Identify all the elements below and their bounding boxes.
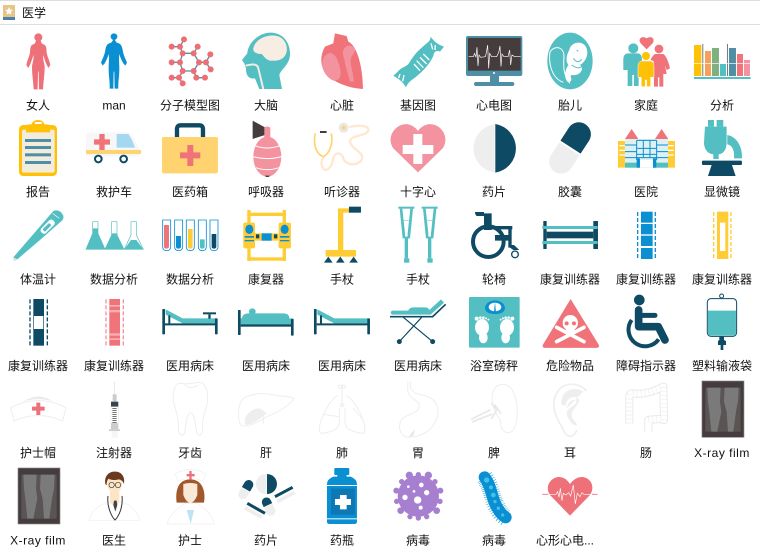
label: 医用病床 <box>166 358 214 373</box>
cell: 女人 <box>26 33 50 112</box>
cell: 医用病床 4 <box>390 299 446 373</box>
cell: 牙齿 <box>173 382 208 460</box>
label: 轮椅 <box>482 272 506 286</box>
icon: molecule <box>169 36 214 86</box>
cell: 数据分析 <box>86 222 143 286</box>
icon: clipboard <box>19 120 57 176</box>
icon: header star <box>3 5 15 20</box>
label: 肠 <box>640 446 652 460</box>
icon: bacterium <box>484 477 506 517</box>
icon: rehab device <box>243 210 291 261</box>
cell: 心形心电图 <box>536 477 598 548</box>
cell: 医用病床 3 <box>314 309 370 373</box>
label: 女人 <box>26 98 50 112</box>
label: X-ray film <box>10 534 66 548</box>
icon: heart with cross <box>391 124 445 172</box>
label: 康复器 <box>248 272 284 286</box>
cell: 胎儿 <box>547 33 593 112</box>
cell: 家庭 <box>623 37 670 112</box>
cell: 数据分析 2 <box>163 220 218 286</box>
cell: 脾 <box>472 384 517 460</box>
label: 病毒 <box>406 532 430 548</box>
cell: 报告 <box>19 120 57 199</box>
icon: yellow rehab strip <box>714 212 731 259</box>
icon: x-ray film <box>18 468 60 524</box>
label: 呼吸器 <box>248 185 284 199</box>
cell: 病毒 1 <box>393 472 443 548</box>
label: 注射器 <box>96 445 132 460</box>
icon: medicine case <box>162 125 218 173</box>
icon: blue rehab strip <box>638 212 655 259</box>
cell: 肝 <box>238 394 294 460</box>
icon: purple virus <box>393 472 443 521</box>
label: 听诊器 <box>324 185 360 199</box>
label: 康复训练器 <box>540 272 600 286</box>
icon: test tubes <box>163 220 218 251</box>
label: 障碍指示器 <box>616 358 676 373</box>
cell: 听诊器 <box>315 123 368 199</box>
icon: hospital bed <box>314 309 370 334</box>
label: 危险物品 <box>546 358 594 373</box>
cell: 医用病床 1 <box>162 309 218 373</box>
label: 康复训练器 <box>8 358 68 373</box>
cell: 医药箱 <box>162 125 218 199</box>
label: 医用病床 <box>318 358 366 373</box>
icon: heart organ <box>321 33 363 89</box>
icon: ECG monitor <box>466 36 522 86</box>
label: 数据分析 <box>90 272 138 286</box>
cell: 轮椅 <box>473 212 519 286</box>
label: 肝 <box>260 446 272 460</box>
icon: spleen <box>472 384 517 433</box>
cell: 护士帽 <box>11 397 66 460</box>
label: 报告 <box>26 184 50 199</box>
cell: 康复训练器 2 <box>616 212 676 286</box>
icon: intestine <box>629 387 664 432</box>
label: 手杖 <box>330 272 354 286</box>
cell: 护士 <box>167 469 214 548</box>
icon: stethoscope <box>315 123 368 170</box>
cell: 肠 <box>629 387 664 460</box>
cell: 呼吸器 <box>248 121 284 199</box>
cell: 分子模型图 <box>160 36 220 113</box>
label: 心脏 <box>330 98 354 112</box>
icon: stomach <box>400 382 438 437</box>
label: man <box>102 98 126 112</box>
label: 护士 <box>178 534 202 548</box>
label: 家庭 <box>634 98 658 112</box>
label: 医院 <box>634 185 658 199</box>
icon: bar chart <box>694 44 751 79</box>
icon: family <box>623 37 670 87</box>
label: 心电图 <box>476 98 512 112</box>
label: 医药箱 <box>172 184 208 199</box>
icon: doctor <box>89 472 139 521</box>
header bar <box>0 0 760 25</box>
icon: nurse cap <box>11 397 66 421</box>
cell: 康复训练器 1 <box>540 221 600 286</box>
cell: 医生 <box>89 472 139 548</box>
label: 大脑 <box>254 98 278 112</box>
icon: bathroom scale <box>469 297 520 348</box>
cell: X-ray film 1 <box>694 381 750 460</box>
icon: capsule <box>544 118 595 178</box>
icon: microscope <box>702 120 742 176</box>
icon: woman <box>26 33 50 89</box>
icon: hospital bed with patient <box>238 308 294 336</box>
label: 牙齿 <box>178 446 202 460</box>
label: 塑料输液袋 <box>692 358 752 373</box>
cell: 药片 2 <box>237 474 295 548</box>
label: 基因图 <box>400 98 436 112</box>
cell: 十字心 <box>391 124 445 199</box>
icon: syringe <box>109 382 120 438</box>
cell: 危险物品 <box>543 300 599 373</box>
label: 护士帽 <box>20 445 56 460</box>
icon: crutches <box>398 207 438 263</box>
cell: 心电图 <box>466 36 522 112</box>
label: 康复训练器 <box>692 272 752 286</box>
icon: dark rehab strip <box>30 299 47 346</box>
label: 病毒 <box>482 532 506 548</box>
cell: 心脏 <box>321 33 363 112</box>
label: 显微镜 <box>704 184 740 199</box>
icon: half tablet <box>473 124 516 173</box>
cell: X-ray film 2 <box>10 468 66 548</box>
icon: assorted pills <box>237 474 295 517</box>
label: 康复训练器 <box>84 358 144 373</box>
cell: 胃 <box>400 382 438 460</box>
label: 医用病床 <box>242 358 290 373</box>
icon: hospital <box>618 129 675 168</box>
label: 十字心 <box>400 184 436 199</box>
icon: man <box>101 33 127 89</box>
icon: hazard triangle <box>543 300 599 347</box>
label: 医生 <box>102 534 126 548</box>
label: 浴室磅秤 <box>470 358 518 373</box>
cell: 分析 <box>694 44 751 112</box>
icon: wheelchair <box>473 212 519 258</box>
label: X-ray film <box>694 446 750 460</box>
label: 耳 <box>564 446 576 460</box>
icon: heart with ECG <box>542 477 598 516</box>
label: 医用病床 <box>394 358 442 373</box>
icon: x-ray film <box>702 381 744 437</box>
label: 康复训练器 <box>616 272 676 286</box>
cell: 药片 <box>473 124 516 199</box>
icon: ambulance <box>86 132 141 162</box>
cell: 手杖 <box>324 207 361 286</box>
icon: ear <box>554 384 587 436</box>
icon: lungs <box>319 385 365 433</box>
icon: brain head <box>242 33 290 89</box>
cell: 胶囊 <box>544 118 595 199</box>
cell: 救护车 <box>86 132 141 199</box>
icon: red rehab strip <box>106 299 123 346</box>
cell: 医用病床 2 <box>238 308 294 373</box>
icon: nurse <box>167 469 214 524</box>
icon: hospital bed with table <box>162 309 218 334</box>
icon: liver <box>238 394 294 426</box>
cell: 康复训练器 3 <box>692 212 752 286</box>
label: 体温计 <box>20 272 56 286</box>
cell: 医院 <box>618 129 675 199</box>
cell: 大脑 <box>242 33 290 112</box>
cell: 注射器 <box>96 382 132 460</box>
label: 手杖 <box>406 272 430 286</box>
label: 药瓶 <box>330 534 354 548</box>
icon: flasks <box>86 222 143 249</box>
cell: 体温计 <box>13 210 63 286</box>
heading: 医学 <box>22 5 46 20</box>
icon: IV bag <box>707 294 737 350</box>
cell: 显微镜 <box>702 120 742 199</box>
cell: 康复训练器 5 <box>84 299 144 373</box>
label: 胎儿 <box>558 98 582 112</box>
label: 肺 <box>336 446 348 460</box>
icon: tooth <box>173 382 208 435</box>
cell: 康复训练器 4 <box>8 299 68 373</box>
cell: 浴室磅秤 <box>469 297 520 373</box>
label: 数据分析 <box>166 272 214 286</box>
label: 救护车 <box>96 184 132 199</box>
cell: 康复器 <box>243 210 291 286</box>
cell: 障碍指示器 <box>616 295 676 373</box>
label: 胶囊 <box>558 184 582 199</box>
cell: man <box>101 33 127 112</box>
cell: 病毒 2 <box>482 477 506 548</box>
icon: accessibility symbol <box>629 295 665 346</box>
icon: walking cane <box>324 207 361 263</box>
cell: 塑料输液袋 <box>692 294 752 373</box>
icon: DNA helix <box>393 37 444 87</box>
label: 脾 <box>488 445 500 460</box>
icon: rehab trainer bars <box>542 221 598 249</box>
label: 分子模型图 <box>160 98 220 112</box>
cell: 基因图 <box>393 37 444 113</box>
label: 药片 <box>482 185 506 199</box>
icon: thermometer <box>13 210 63 261</box>
cell: 手杖 crutches <box>398 207 438 286</box>
icon: respirator bulb <box>253 121 281 177</box>
icon: fetus <box>547 33 593 89</box>
cell: 耳 <box>554 384 587 460</box>
icon: medicine bottle <box>327 468 357 524</box>
cell: 药瓶 <box>327 468 357 548</box>
icon: stretcher <box>390 299 446 344</box>
label: 药片 <box>254 534 278 548</box>
label: 胃 <box>412 446 424 460</box>
cell: 肺 <box>319 385 365 460</box>
label: 心形心电... <box>536 534 594 548</box>
label: 分析 <box>710 98 734 112</box>
